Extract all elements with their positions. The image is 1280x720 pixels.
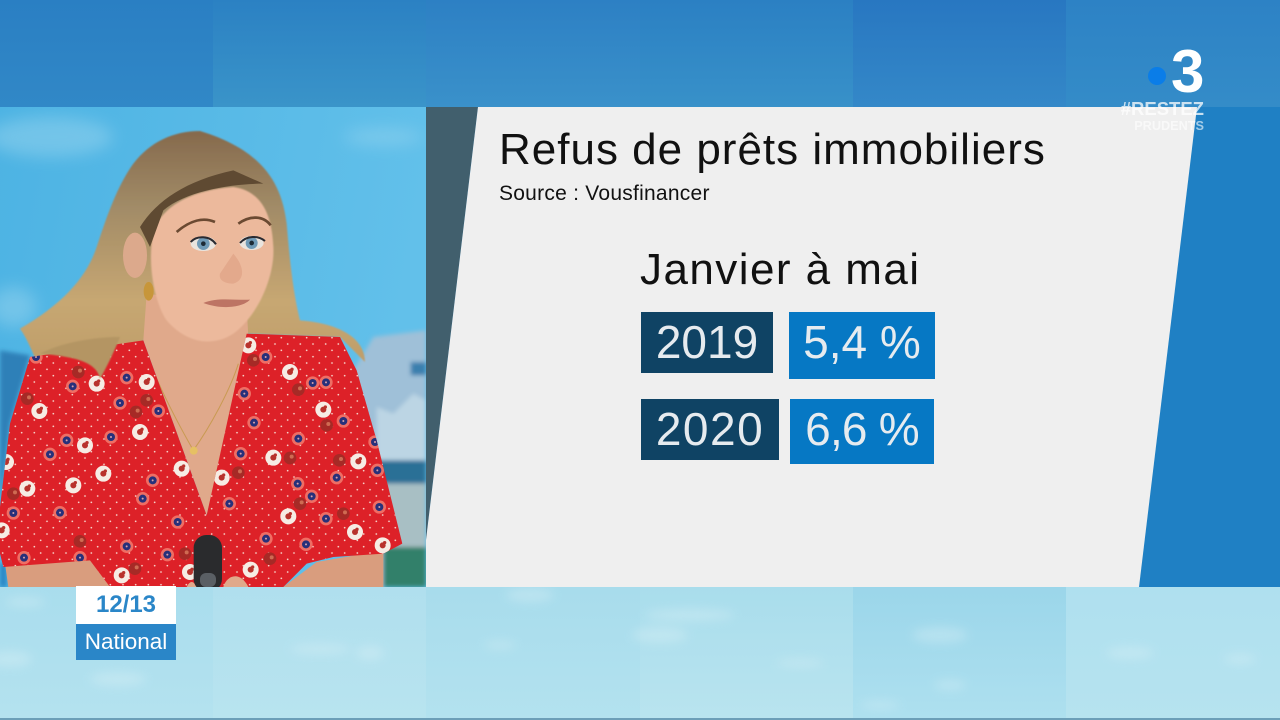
row 2019 <box>641 312 935 379</box>
year 2019 <box>641 312 773 373</box>
eyebrows <box>177 218 271 232</box>
info panel <box>426 107 1280 587</box>
source: Source : Vousfinancer <box>499 182 710 205</box>
title: Refus de prêts immobiliers <box>499 125 1046 174</box>
red dress <box>0 330 426 587</box>
necklace <box>147 354 238 450</box>
hands <box>187 576 248 587</box>
right eye <box>240 236 265 250</box>
edition time <box>76 586 176 624</box>
value 2019: 5,4 % <box>803 316 921 368</box>
pendant <box>190 447 198 455</box>
background clouds <box>0 117 423 327</box>
face <box>151 187 273 341</box>
edition badge <box>76 586 176 660</box>
white flowers <box>0 337 391 583</box>
hair <box>20 131 365 374</box>
earring <box>144 282 154 301</box>
left eye <box>191 236 216 251</box>
subheading: Janvier à mai <box>640 245 921 294</box>
value 2019 <box>789 312 935 379</box>
arms <box>5 550 383 587</box>
nose <box>220 254 242 284</box>
channel logo <box>1121 38 1204 133</box>
value 2020: 6,6 % <box>805 403 919 455</box>
mouth <box>203 299 250 307</box>
background city <box>0 330 426 587</box>
logo numeral: 3 <box>1171 38 1204 105</box>
year 2020 <box>641 399 779 460</box>
value 2020 <box>790 399 934 464</box>
logo dot <box>1148 67 1166 85</box>
hair shadow near temple <box>140 170 263 247</box>
edition name: National <box>85 629 167 654</box>
edition time: 12/13 <box>96 591 156 618</box>
logo subtitle: PRUDENTS <box>1134 119 1204 133</box>
year 2020: 2020 <box>656 403 764 455</box>
bottom edge stripe <box>0 718 1280 720</box>
presenter video panel <box>0 107 426 587</box>
dark red flowers <box>7 354 350 575</box>
neck and chest <box>143 294 248 515</box>
row 2020 <box>641 399 934 464</box>
bottom sky banner <box>0 587 1280 718</box>
studio background <box>0 107 426 587</box>
ear <box>123 233 147 278</box>
top banner <box>213 0 1066 107</box>
edition name <box>76 624 176 660</box>
dark slanted band <box>426 107 478 540</box>
microphone <box>194 535 222 592</box>
navy flowers <box>7 350 386 564</box>
presenter <box>0 131 426 592</box>
logo hashtag: #RESTEZ <box>1121 98 1204 119</box>
panel background blue <box>426 107 1280 587</box>
hair strands over shoulder <box>40 337 120 379</box>
light slanted card <box>426 107 1197 587</box>
year 2019: 2019 <box>656 316 758 368</box>
